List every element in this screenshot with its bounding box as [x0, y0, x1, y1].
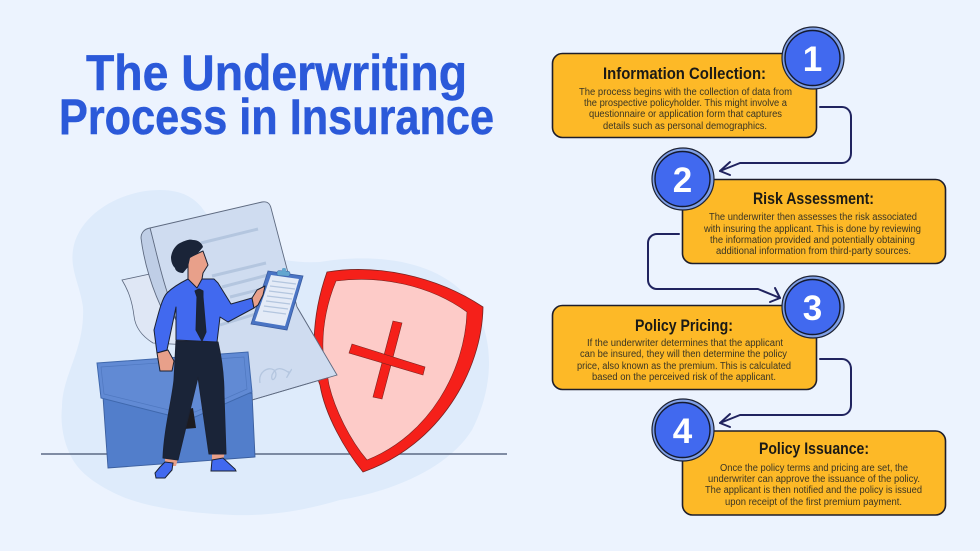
shoes and ankles: [155, 452, 236, 478]
necktie: [195, 289, 206, 341]
body text: step 1: details such as personal demographics.: [603, 121, 767, 132]
shield with cross: [314, 269, 483, 472]
left hand: [157, 350, 174, 371]
heading: risk assessment: Risk Assessment:: [753, 190, 874, 208]
number badge 1: 1: [803, 40, 822, 79]
briefcase: [97, 352, 255, 468]
body text: step 1: questionnaire or application form that captures: [589, 109, 782, 120]
shirt: [154, 279, 254, 353]
document: front corner over shield: [262, 307, 337, 385]
hair: [171, 240, 203, 273]
body text: step 4: Once the policy terms and pricing are set, the: [720, 463, 908, 474]
panel: step 1 information collection: [552, 27, 844, 138]
body text: step 4: upon receipt of the first premium payment.: [725, 497, 902, 508]
trousers: [163, 341, 226, 460]
panel: step 4 policy issuance: [652, 399, 946, 515]
head and neck: [188, 251, 208, 288]
number badge 2: [652, 148, 714, 210]
number badge 4: 4: [673, 412, 693, 451]
title: [59, 45, 494, 145]
body text: step 1: the prospective policyholder. This might involve a: [584, 98, 787, 109]
body text: step 4: The applicant is then notified and the policy is issued: [705, 485, 922, 496]
body text: step 2: the information provided and potentially obtaining: [710, 235, 915, 246]
title: The Underwriting: [86, 45, 467, 101]
ground line: [41, 453, 507, 455]
number badge 4: [652, 399, 714, 461]
body text: step 3: [577, 338, 791, 383]
panel: step 3 policy pricing: [552, 276, 844, 390]
heading: information collection: Information Collection:: [603, 65, 766, 83]
connector arrow: step 3 to step 4: [720, 359, 851, 427]
body text: step 2: [703, 212, 921, 257]
body text: step 2: additional information from third-party sources.: [716, 246, 911, 257]
background blob: [61, 190, 489, 515]
connector arrow: step 2 to step 3: [648, 234, 780, 302]
body text: step 3: based on the perceived risk of the applicant.: [592, 372, 776, 383]
body text: step 2: The underwriter then assesses the risk associated: [709, 212, 917, 223]
body text: step 2: with insuring the applicant. This is done by reviewing: [703, 224, 921, 235]
body text: step 3: can be insured, they will then determine the policy: [580, 349, 787, 360]
body text: step 4: underwriter can approve the issuance of the policy.: [708, 474, 920, 485]
body text: step 4: [705, 463, 922, 508]
document: lower page: [122, 274, 190, 345]
number badge 1: [782, 27, 844, 89]
number badge 3: 3: [803, 289, 822, 328]
heading: policy issuance: Policy Issuance:: [759, 440, 869, 458]
title: Process in Insurance: [59, 89, 494, 145]
right hand: [252, 286, 265, 308]
clipboard: [251, 268, 303, 330]
body text: step 3: price, also known as the premium. This is calculated: [577, 361, 791, 372]
body text: step 1: [579, 87, 792, 132]
heading: policy pricing: Policy Pricing:: [635, 317, 733, 335]
illustration: underwriter with documents and shield: [41, 190, 507, 515]
number badge 3: [782, 276, 844, 338]
body text: step 3: If the underwriter determines that the applicant: [587, 338, 783, 349]
person: [154, 240, 265, 478]
body text: step 1: The process begins with the collection of data from: [579, 87, 792, 98]
number badge 2: 2: [673, 161, 692, 200]
connector arrow: step 1 to step 2: [720, 107, 851, 175]
document: scroll contract: [141, 202, 337, 400]
panel: step 2 risk assessment: [652, 148, 946, 264]
